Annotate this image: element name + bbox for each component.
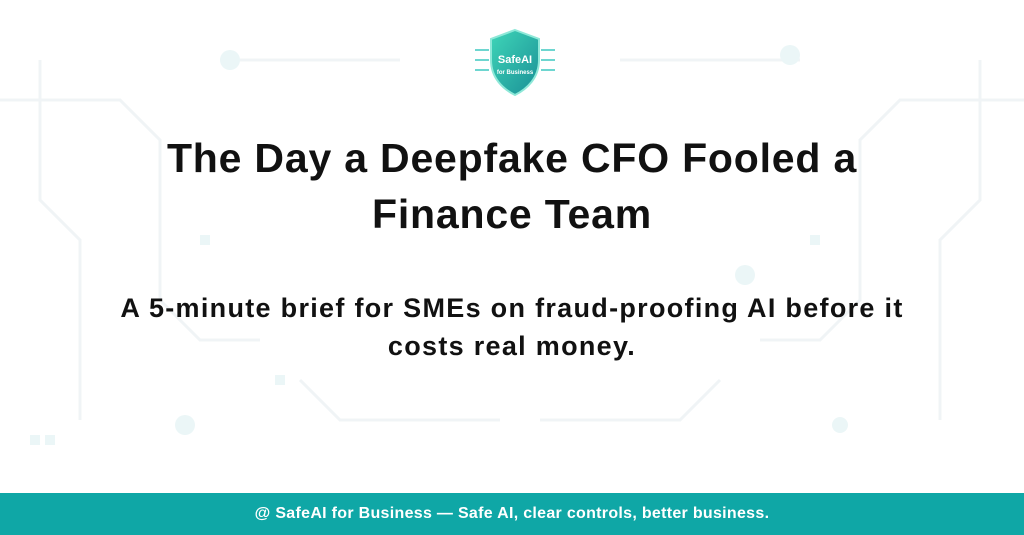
title (167, 135, 857, 237)
logo: for Business (497, 70, 534, 76)
logo: SafeAI (498, 54, 532, 66)
footer bar (0, 493, 1024, 535)
title: The Day a Deepfake CFO Fooled a (167, 135, 857, 181)
subtitle: A 5-minute brief for SMEs on fraud-proofing AI before it (120, 293, 904, 323)
footer bar: @ SafeAI for Business — Safe AI, clear controls, better business. (255, 505, 769, 522)
logo (475, 28, 555, 96)
subtitle (120, 293, 904, 361)
title: Finance Team (372, 191, 652, 237)
subtitle: costs real money. (388, 331, 636, 361)
